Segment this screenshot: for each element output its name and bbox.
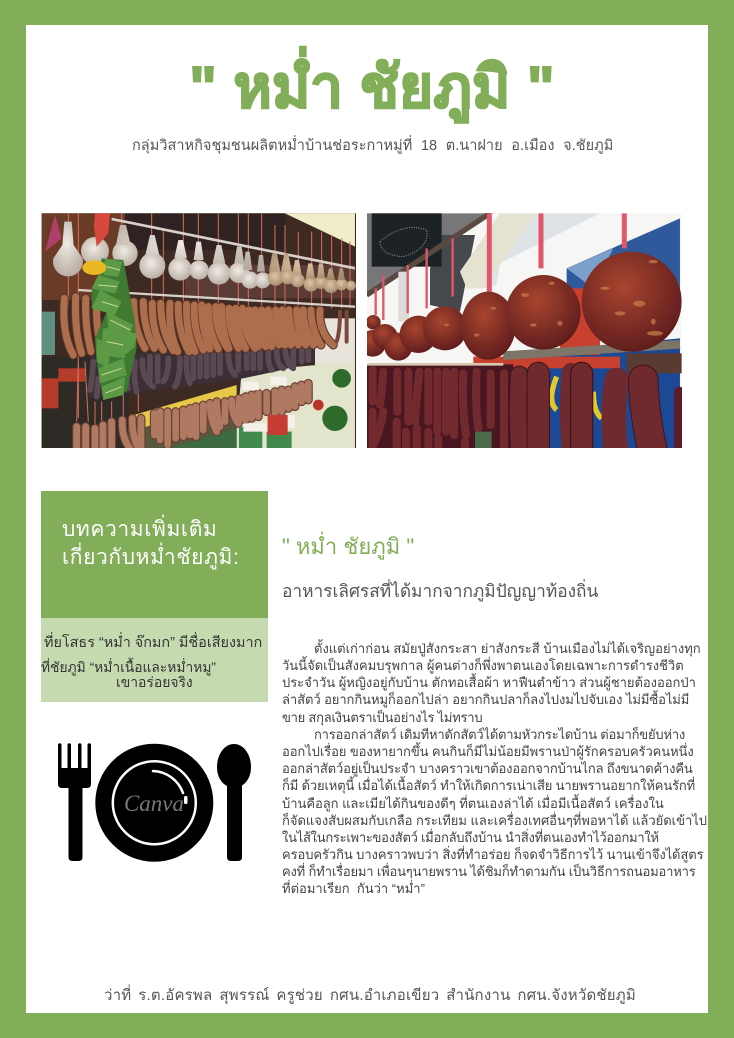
photo: hanging sausages at a shop xyxy=(42,213,356,448)
article body text: ก็มี ด้วยเหตุนี้ เมื่อได้เนื้อสัตว์ ทำให้เกิดการเน่าเสีย นายพรานอยากให้คนรักที่ xyxy=(282,778,695,793)
summary line three: เขาอร่อยจริง xyxy=(116,674,193,690)
article body text: ก็จัดแจงสับผสมกับเกลือ กระเทียม และเครื่องเทศอื่นๆที่พอหาได้ แล้วยัดเข้าไป xyxy=(282,813,707,828)
article body text: ล่าสัตว์ อยากกินหมูก็ออกไปล่า อยากกินปลาก็ลงไปงมไปจับเอง ไม่มีซื้อไม่มี xyxy=(282,692,689,707)
article body text: ออกล่าสัตว์อยู่เป็นประจำ บางคราวเขาต้องออกจากบ้านไกล ถึงขนาดค้างคืน xyxy=(282,761,693,776)
article body text: ประจำวัน ผู้หญิงอยู่กับบ้าน ตักทอเสื้อผ้า หาฟืนตำข้าว ส่วนผู้ชายต้องออกป่า xyxy=(282,675,696,690)
plate xyxy=(95,744,213,862)
title: " หม่ำ ชัยภูมิ " xyxy=(189,55,555,120)
article body text: วันนี้จัดเป็นสังคมบรุพกาล ผู้คนต่างก็พึ่งพาตนเองโดยเฉพาะการดำรงชีวิต xyxy=(282,658,684,673)
article body text: ที่ต่อมาเรียก กันว่า “หม่ำ” xyxy=(282,881,425,896)
article body text: ครอบครัวกิน บางคราวพบว่า สิ่งที่ทำอร่อย ก็จดจำวิธีการไว้ นานเข้าจึงได้สูตร xyxy=(282,847,704,862)
article body text: ในไส้ในกระเพาะของสัตว์ เมื่อกลับถึงบ้าน นำสิ่งที่ตนเองทำไว้ออกมาให้ xyxy=(282,830,659,845)
subtitle: กลุ่มวิสาหกิจชุมชนผลิตหม่ำบ้านช่อระกาหมู่ที่ 18 ต.นาฝาย อ.เมือง จ.ชัยภูมิ xyxy=(132,138,613,154)
panel: article summary xyxy=(41,618,268,702)
article body text: บ้านคือลูก และเมียได้กินของดีๆ ที่ตนเองล่าได้ เมื่อมีเนื้อสัตว์ เครื่องใน xyxy=(282,796,664,811)
article body text: คงที่ ก็ทำเรื่อยมา เพื่อนๆนายพราน ได้ชิมก็ทำตามกัน เป็นวิธีการถนอมอาหาร xyxy=(282,864,696,879)
footer credit: ว่าที่ ร.ต.อัครพล สุพรรณ์ ครูช่วย กศน.อำเภอเขียว สำนักงาน กศน.จังหวัดชัยภูมิ xyxy=(104,987,636,1004)
panel heading text xyxy=(62,514,239,570)
article body text: ขาย สกุลเงินตราเป็นอย่างไร ไม่ทราบ xyxy=(282,710,482,725)
fork xyxy=(58,743,91,861)
article body text: ออกไปเรื่อย ของหายากขึ้น คนกินก็มีไม่น้อยมีพรานป่าผู้รักครอบครัวคนหนึ่ง xyxy=(282,744,694,759)
panel heading text: บทความเพิ่มเติม xyxy=(62,518,217,541)
panel heading text: เกี่ยวกับหม่ำชัยภูมิ: xyxy=(62,546,239,569)
icon: fork, plate and spoon xyxy=(58,743,251,862)
photo: round and long dark red sausages xyxy=(367,213,682,448)
article body text: การออกล่าสัตว์ เดิมทีหาดักสัตว์ได้ตามหัวกระไดบ้าน ต่อมาก็ขยับห่าง xyxy=(314,727,685,742)
panel: more articles heading xyxy=(41,491,268,618)
article heading: " หม่ำ ชัยภูมิ " xyxy=(282,534,414,559)
plate: Canva xyxy=(124,791,184,816)
article subheading: อาหารเลิศรสที่ได้มากจากภูมิปัญญาท้องถิ่น xyxy=(282,581,598,601)
article body text: ตั้งแต่เก่าก่อน สมัยปู่สังกระสา ย่าสังกระสี บ้านเมืองไม่ได้เจริญอย่างทุก xyxy=(314,641,701,656)
summary line two: ที่ชัยภูมิ “หม่ำเนื้อและหม่ำหมู” xyxy=(41,660,216,675)
spoon xyxy=(217,744,251,861)
summary line one: ที่ยโสธร “หม่ำ จ๊กมก” มีชื่อเสียงมาก xyxy=(44,635,262,651)
